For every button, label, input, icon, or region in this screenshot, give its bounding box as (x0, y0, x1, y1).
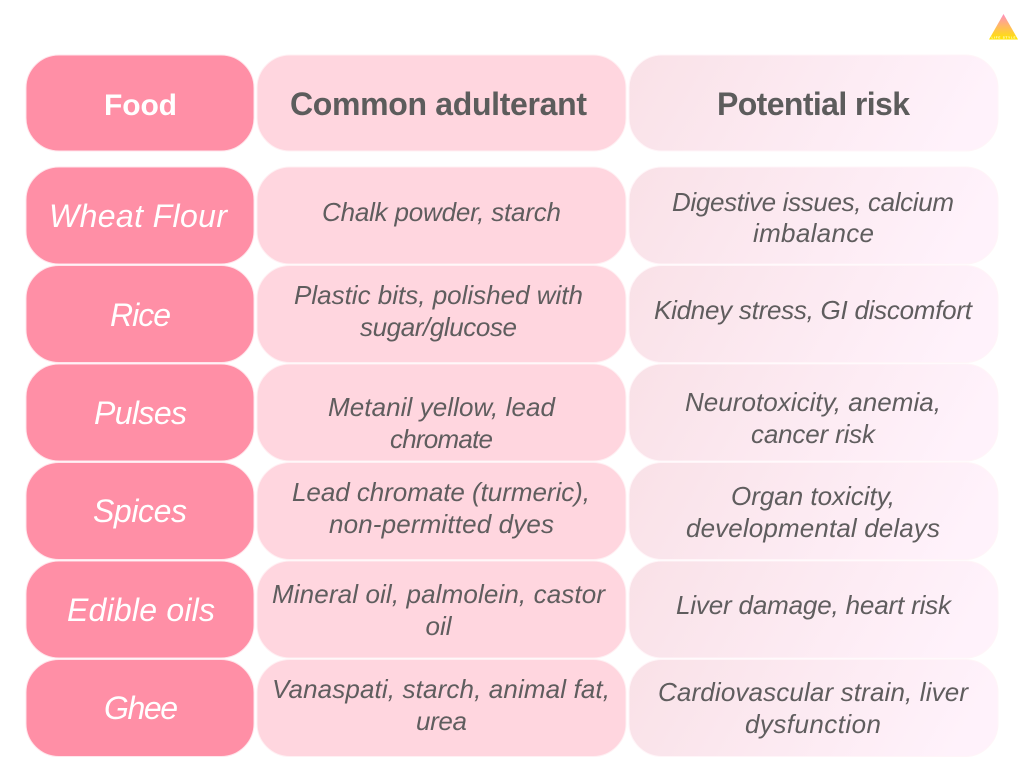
adulterant cell: wheat flour (257, 167, 626, 264)
adulterant cell: edible oils: Mineral oil, palmolein, castor (272, 579, 606, 609)
header: Potential risk: Potential risk (717, 86, 910, 122)
risk cell: pulses: cancer risk (751, 419, 877, 449)
risk cell: wheat flour: imbalance (753, 218, 874, 248)
risk cell: wheat flour: Digestive issues, calcium (672, 187, 954, 217)
food cell: Pulses: Pulses (94, 395, 187, 431)
row: Wheat Flour (26, 167, 998, 264)
risk cell: ghee: Cardiovascular strain, liver (658, 677, 969, 707)
adulterant cell: wheat flour: Chalk powder, starch (322, 197, 561, 227)
food cell: Rice (26, 266, 254, 362)
adulterant cell: spices: non-permitted dyes (329, 509, 554, 539)
adulterant cell: edible oils (257, 561, 626, 658)
risk cell: rice (629, 266, 998, 362)
adulterant cell: edible oils: oil (425, 611, 453, 641)
risk cell: rice: Kidney stress, GI discomfort (654, 295, 974, 325)
risk cell: pulses (629, 364, 998, 461)
risk cell: spices: developmental delays (686, 513, 940, 543)
risk cell: edible oils (629, 561, 998, 658)
header: Common adulterant (257, 55, 626, 151)
risk cell: ghee (629, 660, 998, 756)
food cell: Edible oils: Edible oils (67, 592, 215, 628)
food cell: Pulses (26, 364, 254, 461)
adulterant cell: pulses: chromate (390, 424, 493, 454)
row: Rice (26, 266, 998, 362)
adulterant cell: pulses: Metanil yellow, lead (328, 392, 557, 422)
adulterant cell: ghee (257, 660, 626, 756)
header: Food (26, 55, 254, 151)
row: Edible oils (26, 561, 998, 658)
food cell: Wheat Flour: Wheat Flour (49, 198, 228, 234)
risk cell: edible oils: Liver damage, heart risk (676, 590, 953, 620)
risk cell: pulses: Neurotoxicity, anemia, (685, 387, 941, 417)
risk cell: ghee: dysfunction (745, 709, 881, 739)
icon: logo triangle: LIFE STYLE (992, 36, 1016, 40)
adulterant cell: pulses (257, 364, 626, 461)
risk cell: spices: Organ toxicity, (731, 481, 895, 511)
food cell: Edible oils (26, 561, 254, 658)
adulterant cell: ghee: urea (416, 706, 467, 736)
adulterant cell: ghee: Vanaspati, starch, animal fat, (272, 674, 610, 704)
row: Pulses (26, 364, 998, 461)
row: Spices (26, 462, 998, 560)
adulterant cell: spices (257, 462, 626, 560)
icon: logo triangle (989, 14, 1018, 40)
food cell: Spices (26, 462, 254, 560)
adulterant cell: spices: Lead chromate (turmeric), (292, 477, 590, 507)
food cell: Ghee: Ghee (104, 690, 178, 726)
adulterant cell: rice: Plastic bits, polished with (294, 280, 583, 310)
food cell: Ghee (26, 660, 254, 756)
header: Potential risk (629, 55, 998, 151)
row: Ghee (26, 660, 998, 756)
header: Food: Food (104, 89, 177, 122)
risk cell: wheat flour (629, 167, 998, 264)
risk cell: spices (629, 462, 998, 560)
adulterant cell: rice: sugar/glucose (360, 312, 517, 342)
food cell: Spices: Spices (93, 493, 187, 529)
food cell: Wheat Flour (26, 167, 254, 264)
header: Common adulterant: Common adulterant (290, 86, 587, 122)
food cell: Rice: Rice (110, 297, 171, 333)
adulterant cell: rice (257, 266, 626, 362)
header row (26, 55, 998, 151)
